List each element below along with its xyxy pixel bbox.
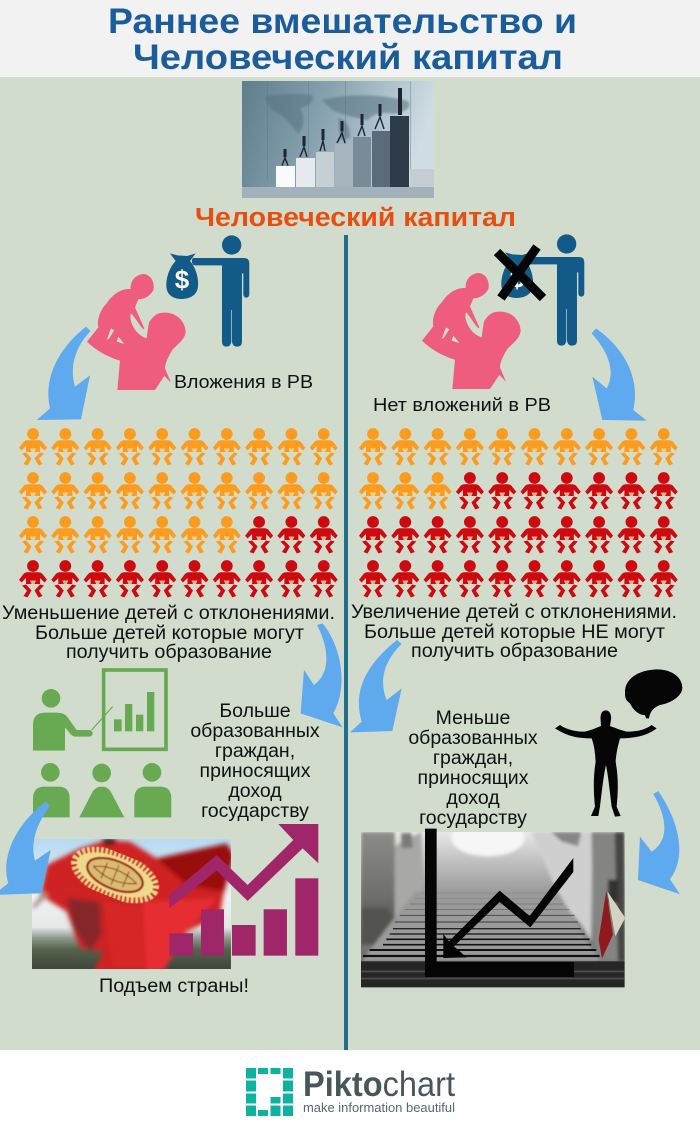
text block: fewer children with disabilities: Уменьшение детей с отклонениями. bbox=[2, 603, 335, 624]
arrow: right column to center bbox=[350, 640, 402, 732]
text block: fewer educated citizens bbox=[408, 707, 538, 829]
label: no investment: Нет вложений в РВ bbox=[373, 394, 551, 415]
tagline: make information beautiful bbox=[303, 1100, 455, 1115]
photo: businessmen climbing bars bbox=[242, 81, 434, 198]
text block: more children with disabilities bbox=[351, 602, 677, 662]
text block: fewer children with disabilities: Больше детей которые могут bbox=[35, 623, 304, 644]
text block: fewer educated citizens: государству bbox=[419, 807, 527, 829]
text block: fewer children with disabilities: получить образование bbox=[66, 642, 272, 663]
icon: Piktochart mark bbox=[246, 1068, 293, 1116]
photo: Kyrgyz flag bbox=[32, 838, 234, 972]
arrow: down left bbox=[37, 327, 91, 420]
icon: classroom presentation bbox=[33, 670, 171, 817]
text block: more children with disabilities: Больше детей которые НЕ могут bbox=[364, 622, 665, 643]
falling chart bbox=[425, 829, 574, 977]
icon: man with money bag bbox=[166, 235, 249, 347]
arrow: to flag bbox=[0, 802, 51, 895]
text block: fewer educated citizens: доход bbox=[446, 787, 500, 809]
icon: man with money bag: $ bbox=[175, 265, 190, 295]
arrow: down right bbox=[592, 328, 647, 421]
arrow: left column to center bbox=[301, 623, 343, 727]
small climbing figures bbox=[282, 88, 400, 166]
icon: mother and baby bbox=[87, 274, 186, 390]
photo: foggy stairs with falling chart bbox=[361, 820, 625, 987]
text block: fewer children with disabilities bbox=[2, 603, 335, 663]
text block: more children with disabilities: Увеличение детей с отклонениями. bbox=[351, 602, 677, 623]
text block: fewer educated citizens: Меньше bbox=[436, 707, 510, 729]
panel: left investment scene bbox=[37, 235, 313, 420]
text block: more educated citizens: образованных bbox=[190, 720, 320, 742]
footer logo: Piktochart bbox=[246, 1065, 455, 1116]
text block: fewer educated citizens: образованных bbox=[408, 727, 538, 749]
text block: more educated citizens: доход bbox=[228, 780, 282, 802]
icon: magenta rising bar chart bbox=[169, 824, 318, 956]
text block: fewer educated citizens: приносящих bbox=[418, 767, 529, 789]
text block: more educated citizens: государству bbox=[201, 800, 309, 822]
text block: fewer educated citizens: граждан, bbox=[433, 747, 513, 769]
title bbox=[108, 2, 577, 77]
text block: more educated citizens: граждан, bbox=[215, 740, 295, 762]
baby grid: left bbox=[19, 428, 338, 598]
center divider bbox=[344, 235, 348, 1050]
text block: more children with disabilities: получить образование bbox=[411, 641, 618, 662]
title: Человеческий капитал bbox=[133, 38, 563, 77]
text block: more educated citizens: Больше bbox=[219, 700, 291, 722]
icon: mother and baby bbox=[422, 273, 521, 389]
icon: man with crossed-out money bag bbox=[497, 234, 584, 346]
wordmark: Piktochart bbox=[303, 1065, 455, 1104]
baby grid: right bbox=[359, 428, 678, 598]
text block: more educated citizens bbox=[190, 700, 320, 822]
text block: more educated citizens: приносящих bbox=[200, 760, 311, 782]
caption: rise of the country: Подъем страны! bbox=[99, 976, 249, 997]
icon: man with crossed-out money bag: $ bbox=[510, 264, 525, 294]
icon: man with brain bbox=[555, 669, 682, 817]
title: Раннее вмешательство и bbox=[108, 2, 577, 41]
panel: right no-investment scene bbox=[373, 234, 647, 421]
arrow: to stair photo bbox=[638, 791, 680, 894]
heading: human capital: Человеческий капитал bbox=[195, 204, 516, 232]
label: investment: Вложения в РВ bbox=[174, 371, 313, 392]
